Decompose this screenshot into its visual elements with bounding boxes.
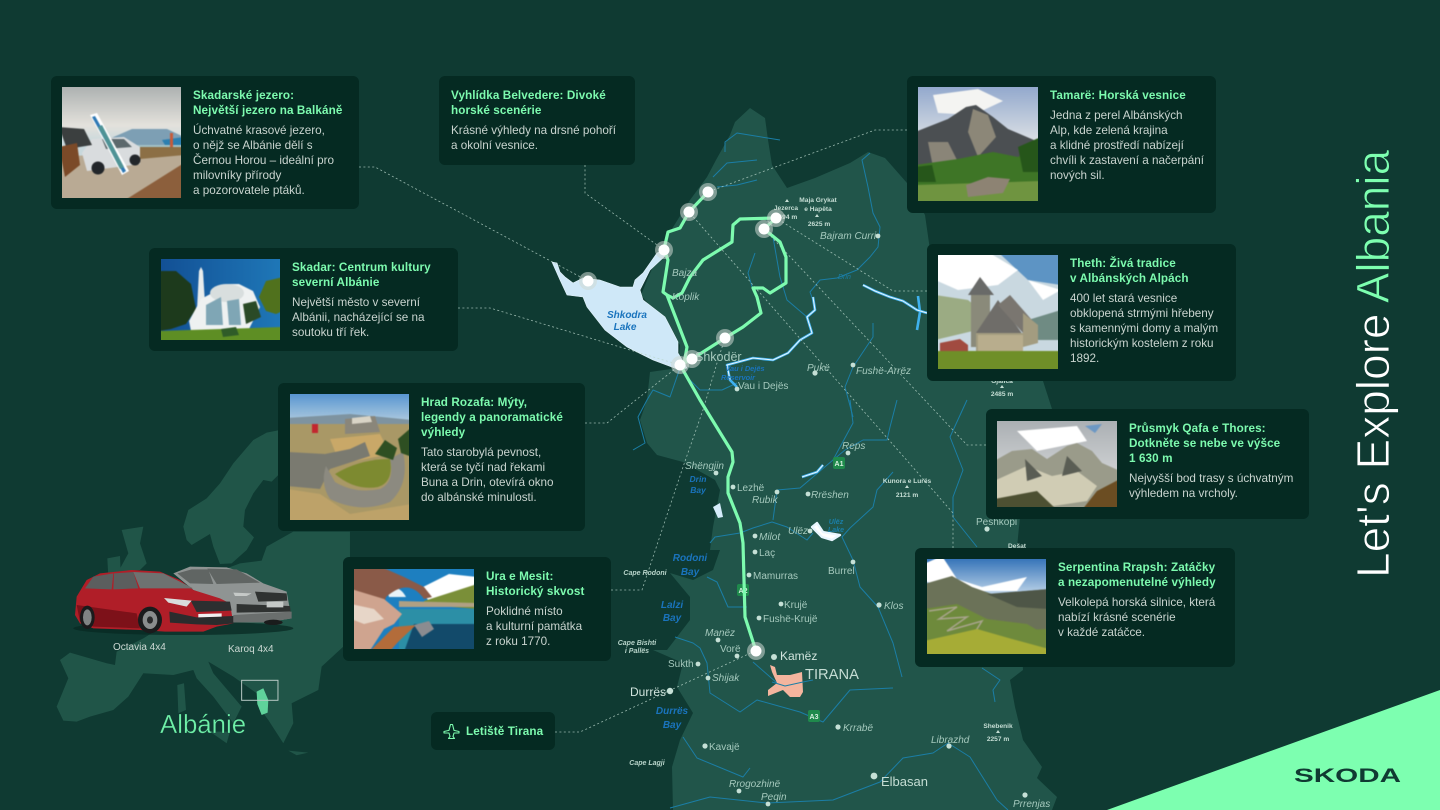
city and place labels: Pukë [807, 363, 830, 374]
text: Skadarské jezero: o nějž se Albánie dělí s [193, 139, 313, 152]
icon: airplane [443, 724, 460, 739]
motorway badges: A3 [810, 714, 819, 721]
capes [618, 570, 668, 767]
text: Skadarské jezero: a pozorovatele ptáků. [193, 184, 305, 197]
text: Vyhlídka Belvedere: a okolní vesnice. [451, 139, 538, 152]
panel: Letiště Tirana [431, 712, 555, 750]
Skoda logo: SKODA [1294, 766, 1401, 787]
mountain peaks: e Hapëta [804, 206, 832, 213]
rivers [633, 133, 1008, 810]
city and place labels: Elbasan [881, 774, 928, 789]
text: Theth: s kamennými domy a malým [1070, 322, 1218, 335]
car labels: Octavia 4x4 [113, 642, 166, 653]
text: Skadar: Největší město v severní [292, 296, 420, 309]
photo: lake with car and paddleboard [62, 87, 181, 198]
panel: Hrad Rozafa [278, 383, 585, 531]
text: Theth: historickým kostelem z roku [1070, 337, 1214, 350]
text: Theth: obklopená strmými hřebeny [1070, 307, 1214, 320]
bay and water labels [656, 274, 851, 731]
capes: Cape Lagji [629, 760, 666, 767]
city and place labels: Ulëz [788, 526, 808, 537]
mountain peaks: Jezerca [774, 205, 798, 212]
mountain peaks: Gjalica [991, 378, 1013, 385]
city and place labels: Klos [884, 601, 903, 612]
city and place labels: Rubik [752, 495, 779, 506]
text: Vyhlídka Belvedere: Vyhlídka Belvedere: Divoké [451, 89, 606, 102]
text: Ura e Mesit: Poklidné místo [486, 605, 563, 618]
text: Tamarë: Alp, kde zelená krajina [1050, 124, 1168, 137]
text: Tamarë: chvíli k zastavení a načerpání [1050, 154, 1204, 167]
river through Tirana [772, 682, 803, 686]
text: Serpentina Rrapsh: nabízí krásné scenérie [1058, 611, 1176, 624]
Octavia red car [75, 570, 233, 633]
Albania highlight [257, 688, 268, 715]
panel: Qafa e Thores [986, 409, 1309, 519]
text: Serpentina Rrapsh [1058, 561, 1216, 639]
city and place labels: Peshkopi [976, 517, 1017, 528]
city and place labels: Vau i Dejës [738, 381, 788, 392]
bay and water labels: Drin [690, 474, 706, 484]
text: Theth: 1892. [1070, 352, 1099, 365]
city and place labels: Sukth [668, 659, 694, 670]
city and place labels: Shijak [712, 673, 740, 684]
text: Vyhlídka Belvedere [451, 89, 616, 152]
city and place labels: Kavajë [709, 742, 740, 753]
text: Ura e Mesit: Ura e Mesit: [486, 570, 553, 583]
text: Qafa e Thores: Nejvyšší bod trasy s úchvatným [1129, 472, 1293, 485]
text: Ura e Mesit: a kulturní památka [486, 620, 582, 633]
photo: serpentine road [927, 559, 1046, 654]
text: Skadarské jezero: Největší jezero na Balkáně [193, 104, 342, 117]
city and place labels: Manëz [705, 628, 735, 639]
route line [663, 192, 786, 651]
city and place labels: Milot [759, 532, 781, 543]
city and place labels: Peqin [761, 792, 787, 803]
city dots [667, 234, 1028, 806]
text: Ura e Mesit [486, 570, 584, 648]
text: Skadar: Skadar: Centrum kultury [292, 261, 431, 274]
city and place labels: Prrenjas [1013, 799, 1050, 810]
text: Hrad Rozafa: Buna a Drin, otevírá okno [421, 476, 554, 489]
motorway badges [737, 457, 845, 722]
locator rectangle [242, 680, 278, 700]
city and place labels: Kamëz [780, 649, 817, 663]
text: Hrad Rozafa: Hrad Rozafa: Mýty, [421, 396, 527, 409]
reservoirs and bright rivers [727, 285, 927, 540]
city and place labels: Rrogozhinë [729, 779, 781, 790]
text: Theth [1070, 256, 1218, 365]
corner triangle [1107, 690, 1440, 810]
bay and water labels: Rodoni [673, 553, 707, 564]
text: airport label: Letiště Tirana [466, 725, 543, 738]
capes: Cape Bishti [618, 640, 657, 647]
text: Tamarë: Jedna z perel Albánských [1050, 109, 1183, 122]
motorway badges: A2 [739, 588, 748, 595]
bay and water labels: Reservoir [721, 373, 756, 382]
Crete [288, 751, 308, 755]
Scandinavia [183, 430, 280, 564]
text: Vyhlídka Belvedere: horské scenérie [451, 104, 542, 117]
text: Skadar [292, 261, 431, 339]
motorway badges: A1 [835, 461, 844, 468]
bay and water labels: Drin [838, 274, 851, 281]
text: Tamarë [1050, 89, 1204, 182]
Europe locator map [57, 430, 350, 755]
mountain peaks: 2625 m [808, 221, 830, 228]
photo: Rozafa castle [290, 394, 409, 520]
panel: Ura e Mesit [343, 557, 611, 661]
bay and water labels: Vau i Dejës [725, 364, 765, 373]
text: Skadarské jezero: Skadarské jezero: [193, 89, 294, 102]
city and place labels: Koplik [672, 292, 700, 303]
route stop markers [579, 183, 785, 660]
car labels [113, 642, 274, 655]
panel: Serpentina Rrapsh [915, 548, 1235, 667]
Albánie label: Albánie [160, 711, 246, 739]
city and place labels: Shëngjin [685, 461, 724, 472]
city and place labels: Rrëshen [811, 490, 849, 501]
city and place labels: Fushë-Arrëz [856, 366, 911, 377]
text: Hrad Rozafa: která se tyčí nad řekami [421, 461, 545, 474]
text: Serpentina Rrapsh: v každé zatáčce. [1058, 626, 1145, 639]
city and place labels: Shkodër [695, 350, 742, 364]
text: Qafa e Thores: 1 630 m [1129, 452, 1173, 465]
bay and water labels: Bay [663, 613, 682, 624]
text: Skadar: Albánii, nacházející se na [292, 311, 425, 324]
Shkodra Lake label [607, 310, 647, 333]
text: Qafa e Thores: Dotkněte se nebe ve výšce [1129, 437, 1280, 450]
mountain peaks: 2121 m [896, 492, 918, 499]
mountain peaks: 2485 m [991, 391, 1013, 398]
city and place labels [630, 231, 1050, 810]
text: Ura e Mesit: z roku 1770. [486, 635, 550, 648]
text: Tamarë: Tamarë: Horská vesnice [1050, 89, 1186, 102]
text: Serpentina Rrapsh: Velkolepá horská silnice, která [1058, 596, 1215, 609]
text: Qafa e Thores [1129, 422, 1293, 500]
capes: Cape Rodoni [623, 570, 668, 577]
bay and water labels: Ulëz [829, 519, 844, 526]
city and place labels: Vorë [720, 644, 741, 655]
city and place labels: Librazhd [931, 735, 970, 746]
car labels: Karoq 4x4 [228, 644, 274, 655]
mountain peaks [774, 197, 1027, 743]
city and place labels: Laç [759, 548, 775, 559]
text: Hrad Rozafa: výhledy [421, 426, 465, 439]
city and place labels: TIRANA [805, 667, 859, 683]
text: Skadarské jezero [193, 89, 342, 197]
bay and water labels: Lalzi [661, 600, 683, 611]
panel: Skadarské jezero [51, 76, 359, 209]
text: Theth: v Albánských Alpách [1070, 272, 1189, 285]
mountain peaks: Maja Grykat [799, 197, 837, 204]
city and place labels: Reps [842, 441, 865, 452]
text: Skadarské jezero: milovníky přírody [193, 169, 281, 182]
text: Hrad Rozafa [421, 396, 563, 504]
car shadow [73, 622, 293, 635]
city and place labels: Mamurras [753, 571, 798, 582]
Shkodra Lake label: Lake [614, 322, 637, 333]
text: Tamarë: a klidné prostředí nabízejí [1050, 139, 1184, 152]
photo: rocky peaks [997, 421, 1117, 507]
bay and water labels: Durrës [656, 706, 689, 717]
text: Hrad Rozafa: do albánské minulosti. [421, 491, 537, 504]
Europe mainland [57, 532, 350, 743]
main title: Let's Explore Albania [1347, 149, 1399, 578]
text: Qafa e Thores: Průsmyk Qafa e Thores: [1129, 422, 1266, 435]
photo: mosque [161, 259, 280, 340]
Sardinia and Corsica [177, 683, 186, 713]
Shkodra Lake label: Shkodra [607, 310, 647, 321]
text: Tamarë: nových sil. [1050, 169, 1105, 182]
text: Ura e Mesit: Historický skvost [486, 585, 584, 598]
capes: i Pallës [625, 648, 649, 655]
panel: Theth [927, 244, 1236, 381]
panel: Vyhlídka Belvedere [439, 76, 635, 165]
mountain peaks: 2694 m [775, 214, 797, 221]
text: Qafa e Thores: výhledem na vrcholy. [1129, 487, 1238, 500]
mountain peaks: Kunora e Lurës [883, 478, 932, 485]
bay and water labels: Bay [681, 567, 700, 578]
city and place labels: Bajza [672, 268, 697, 279]
Škoda cars [73, 567, 293, 635]
mountain peaks: Dešat [1008, 543, 1027, 550]
text: Skadar: soutoku tří řek. [292, 326, 369, 339]
bay and water labels: Bay [690, 485, 707, 495]
city and place labels: Krujë [784, 600, 808, 611]
Albania land [640, 108, 1057, 810]
Karoq grey car [173, 567, 292, 625]
Ireland [107, 556, 121, 577]
city and place labels: Krrabë [843, 723, 873, 734]
Sicily [210, 732, 230, 743]
text: Skadarské jezero: Černou Horou – ideální pro [193, 154, 334, 167]
Shkodra Lake [552, 250, 687, 370]
text: Hrad Rozafa: Tato starobylá pevnost, [421, 446, 541, 459]
text: Skadarské jezero: Úchvatné krasové jezero, [193, 124, 325, 137]
city and place labels: Bajram Curri [820, 231, 877, 242]
mountain peaks: Shebenik [983, 723, 1013, 730]
city and place labels: Lezhë [737, 483, 765, 494]
mountain peaks: 2257 m [987, 736, 1009, 743]
city and place labels: Burrel [828, 566, 855, 577]
text: Hrad Rozafa: legendy a panoramatické [421, 411, 563, 424]
text: Theth: 400 let stará vesnice [1070, 292, 1177, 305]
bay and water labels: Lake [828, 527, 844, 534]
text: Serpentina Rrapsh: Serpentina Rrapsh: Zatáčky [1058, 561, 1215, 574]
text: Vyhlídka Belvedere: Krásné výhledy na drsné pohoří [451, 124, 616, 137]
text: Theth: Theth: Živá tradice [1070, 257, 1176, 270]
text: Skadar: severní Albánie [292, 276, 379, 289]
photo: mountain village [918, 87, 1038, 201]
photo: stone bridge [354, 569, 474, 649]
city and place labels: Fushë-Krujë [763, 614, 818, 625]
panel: Tamarë [907, 76, 1216, 213]
United Kingdom [118, 527, 147, 572]
panel: Skadar [149, 248, 458, 351]
dashed connectors [359, 130, 986, 732]
text: Serpentina Rrapsh: a nezapomenutelné výhledy [1058, 576, 1216, 589]
bay and water labels: Bay [663, 720, 682, 731]
Tirana city area [768, 665, 803, 697]
photo: Theth church [938, 255, 1058, 369]
city and place labels: Durrës [630, 685, 666, 699]
small lake near Drin Bay [713, 503, 723, 518]
